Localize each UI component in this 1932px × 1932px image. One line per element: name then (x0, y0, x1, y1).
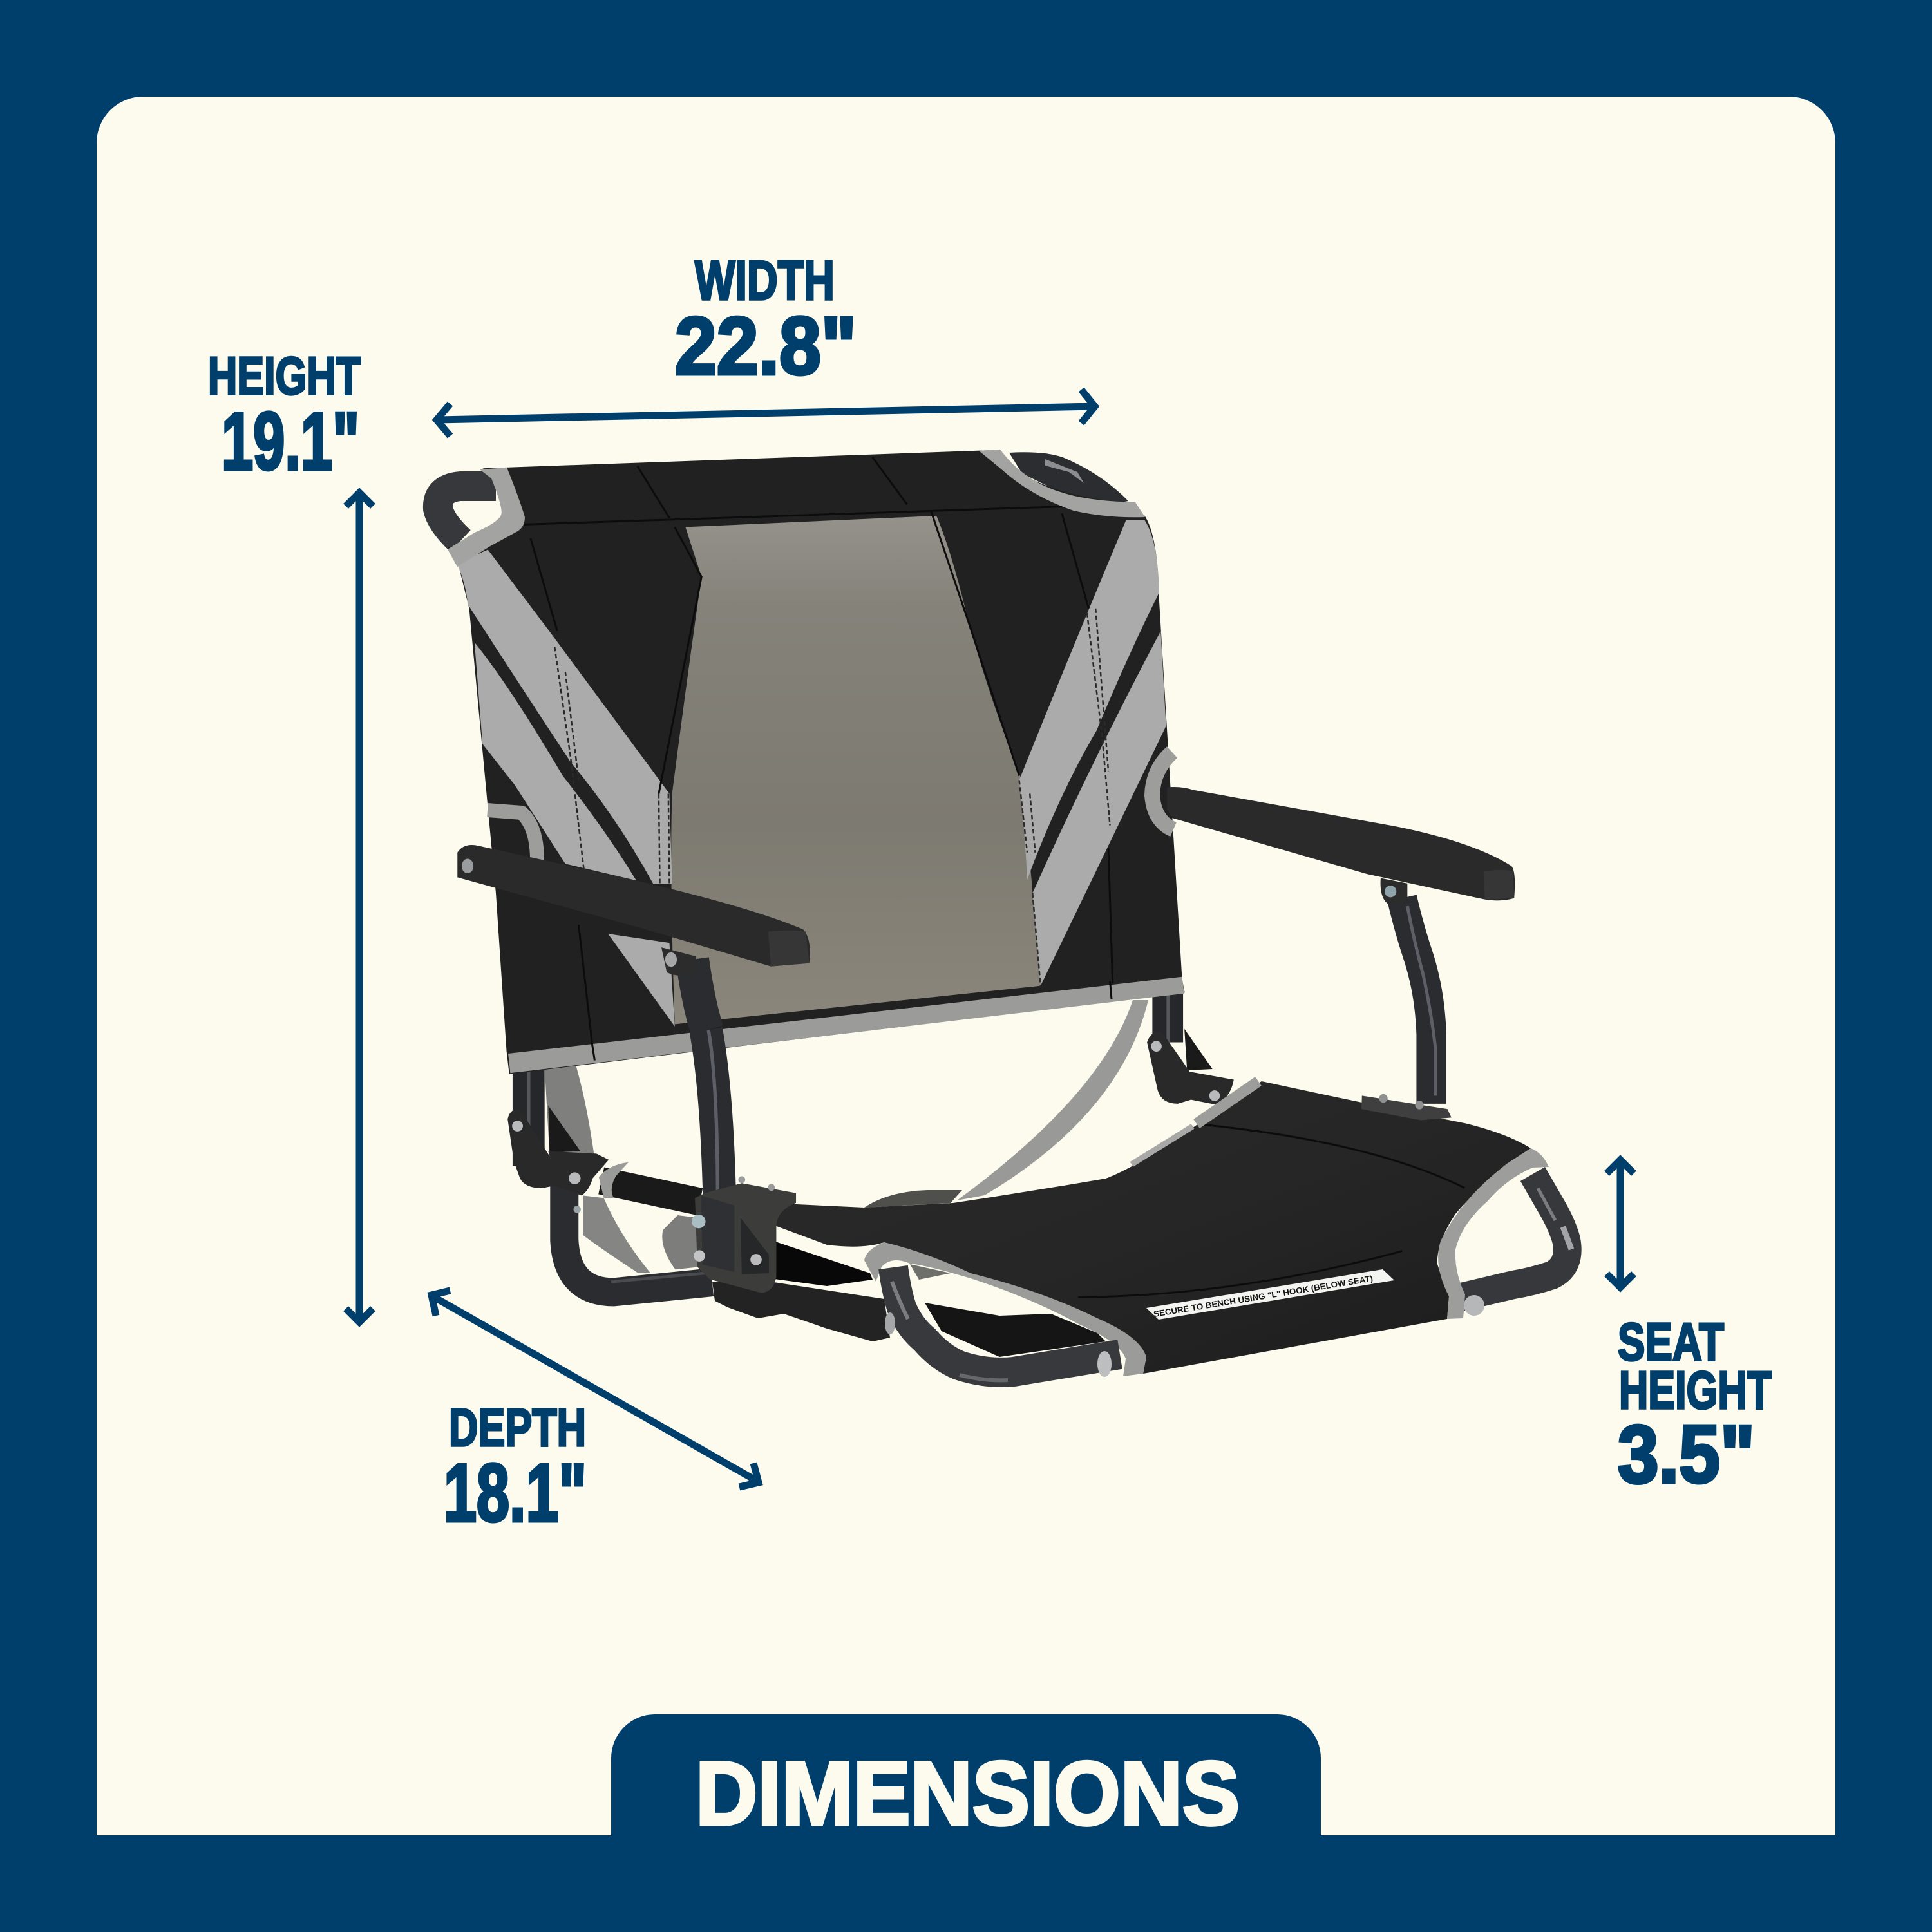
label: width: WIDTH (695, 250, 835, 312)
bottom binding (508, 977, 1184, 1073)
arrow: height (346, 493, 373, 1322)
right grey lower band (1032, 631, 1166, 986)
title: DIMENSIONS (696, 1743, 1240, 1844)
near arm pivot (661, 947, 696, 976)
far arm pad (1167, 787, 1515, 900)
chair photo illustration (438, 450, 1571, 1380)
strap under binding (910, 1264, 951, 1280)
strap roll (864, 1190, 962, 1208)
rear seat binding upper (1197, 1081, 1258, 1124)
under seat rail (712, 1282, 890, 1341)
label: seat height: SEAT (1618, 1312, 1724, 1372)
backrest fabric (448, 450, 1185, 1074)
label: seat height: 3.5" (1618, 1408, 1755, 1500)
near arm post upper (692, 960, 707, 1030)
seat stitching (1078, 1124, 1464, 1297)
near armrest (457, 845, 810, 976)
left grey lower band (475, 642, 636, 880)
black body (448, 450, 1185, 1074)
bracket (695, 1183, 796, 1293)
far armrest (1167, 787, 1515, 1104)
label: width: 22.8" (675, 300, 857, 392)
under seat wedge (925, 1303, 1106, 1357)
right tab (1152, 752, 1173, 829)
label: depth (444, 1397, 587, 1539)
near arm bolt (462, 859, 473, 873)
near arm pad (457, 845, 810, 967)
far arm foot (1361, 1094, 1452, 1121)
label: height: HEIGHT (208, 346, 361, 406)
seat (712, 1081, 1571, 1380)
label: height: 19.1" (222, 395, 359, 487)
right seat frame (1459, 1174, 1571, 1316)
title tab (611, 1714, 1321, 1844)
far hinge (1147, 994, 1234, 1105)
front seat binding (864, 1242, 1146, 1376)
seat fabric (770, 1081, 1531, 1374)
under seat black fabric (770, 1240, 873, 1286)
far arm pivot (1381, 878, 1407, 905)
top-left binding (448, 468, 525, 567)
label: width (675, 250, 857, 392)
centre mesh (671, 516, 1041, 1024)
far strap (957, 1000, 1148, 1200)
label: depth: DEPTH (449, 1397, 586, 1457)
stitching (515, 457, 1126, 1042)
arrow: depth (431, 1291, 759, 1487)
top-left handle tube (438, 486, 496, 541)
right grey upper band (1019, 520, 1159, 880)
arrow: seat height (1607, 1160, 1634, 1287)
far arm post (1402, 898, 1432, 1104)
top-right handle tube (1009, 452, 1128, 506)
left grey upper band (457, 550, 672, 884)
label: depth: 18.1" (444, 1447, 587, 1539)
front seat frame (885, 1267, 1120, 1380)
label: height (208, 346, 361, 487)
top-right binding (979, 450, 1145, 517)
label: seat height: HEIGHT (1619, 1360, 1772, 1420)
lower left wedge (608, 934, 675, 1027)
label: seat height (1618, 1312, 1772, 1500)
near bracket and post (692, 1030, 796, 1293)
arrow: width (437, 390, 1095, 436)
rear frame and straps (507, 1064, 712, 1292)
seat label: SECURE TO BENCH USING "L" HOOK (BELOW SEAT) (1153, 1273, 1374, 1319)
near arm post lower (706, 1030, 719, 1203)
rear seat binding lower (1132, 1126, 1193, 1164)
left tab (488, 810, 537, 863)
right seat binding (1438, 1148, 1549, 1319)
